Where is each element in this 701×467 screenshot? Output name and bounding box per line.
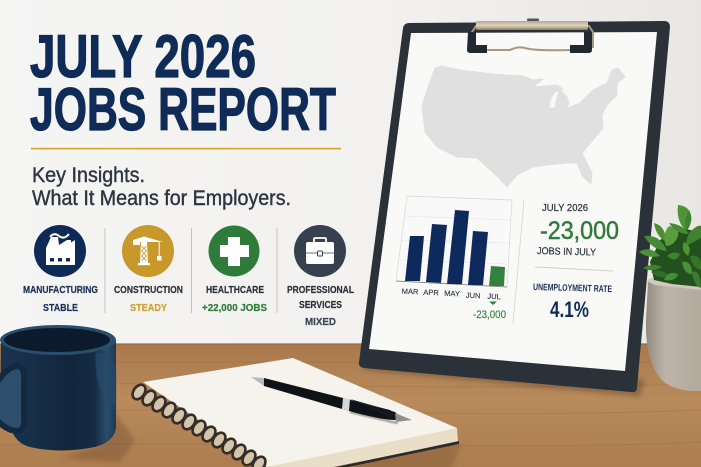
wall background	[0, 0, 701, 345]
wooden table	[0, 343, 701, 467]
divider	[276, 228, 278, 313]
sector row	[23, 225, 354, 328]
professional services sector: PROFESSIONAL	[287, 284, 354, 296]
clipboard board	[359, 21, 670, 392]
healthcare sector: +22,000 JOBS	[202, 302, 267, 314]
key stats: UNEMPLOYMENT RATE	[533, 282, 612, 295]
professional services sector	[287, 225, 354, 328]
mug handle	[0, 366, 24, 431]
bar chart: APR	[423, 288, 440, 297]
key stats: JULY 2026	[542, 203, 588, 214]
US map	[422, 66, 625, 187]
plant pot	[646, 281, 701, 391]
mug shadow	[60, 400, 135, 462]
notebook pages edge	[268, 428, 458, 467]
title: JULY 2026	[30, 23, 256, 90]
subtitle: Key Insights.	[32, 164, 145, 187]
metal clip	[467, 18, 593, 53]
healthcare sector: HEALTHCARE	[206, 284, 264, 296]
manufacturing sector	[23, 225, 98, 314]
clipboard shadow	[361, 340, 645, 397]
construction sector: STEADY	[130, 302, 167, 314]
bar chart: -23,000	[473, 309, 506, 321]
mug opening	[0, 325, 116, 355]
healthcare sector	[202, 226, 267, 314]
plant	[639, 205, 701, 391]
paper sheet	[369, 32, 657, 371]
key stats: -23,000	[540, 217, 619, 245]
key stats: 4.1%	[550, 297, 589, 322]
subtitle	[32, 164, 291, 210]
title: JOBS REPORT	[30, 76, 336, 143]
divider	[104, 228, 106, 313]
panel divider	[513, 200, 524, 323]
key stats: JOBS IN JULY	[537, 246, 596, 259]
construction sector	[114, 225, 183, 314]
gold rule	[31, 148, 341, 149]
mug body	[0, 340, 116, 450]
clipboard	[359, 18, 670, 397]
construction sector: CONSTRUCTION	[114, 284, 183, 296]
manufacturing sector: MANUFACTURING	[23, 284, 98, 296]
manufacturing sector: STABLE	[43, 302, 78, 314]
notebook shadow	[135, 395, 462, 467]
bar chart: JUL	[487, 292, 501, 301]
notebook cover	[143, 358, 457, 467]
mug highlight	[96, 352, 116, 406]
bar chart: MAR	[402, 287, 419, 296]
subtitle: What It Means for Employers.	[32, 187, 291, 210]
coffee mug	[0, 325, 135, 462]
divider	[191, 228, 192, 313]
notebook	[130, 358, 462, 467]
key stats	[533, 203, 619, 322]
professional services sector: MIXED	[305, 316, 336, 328]
spiral binding	[130, 382, 268, 467]
bar chart	[396, 196, 512, 321]
professional services sector: SERVICES	[299, 299, 342, 311]
plant foliage	[639, 205, 701, 288]
bar chart: JUN	[466, 291, 481, 300]
bar chart: MAY	[444, 289, 460, 298]
pen	[251, 377, 412, 423]
title	[30, 23, 336, 143]
